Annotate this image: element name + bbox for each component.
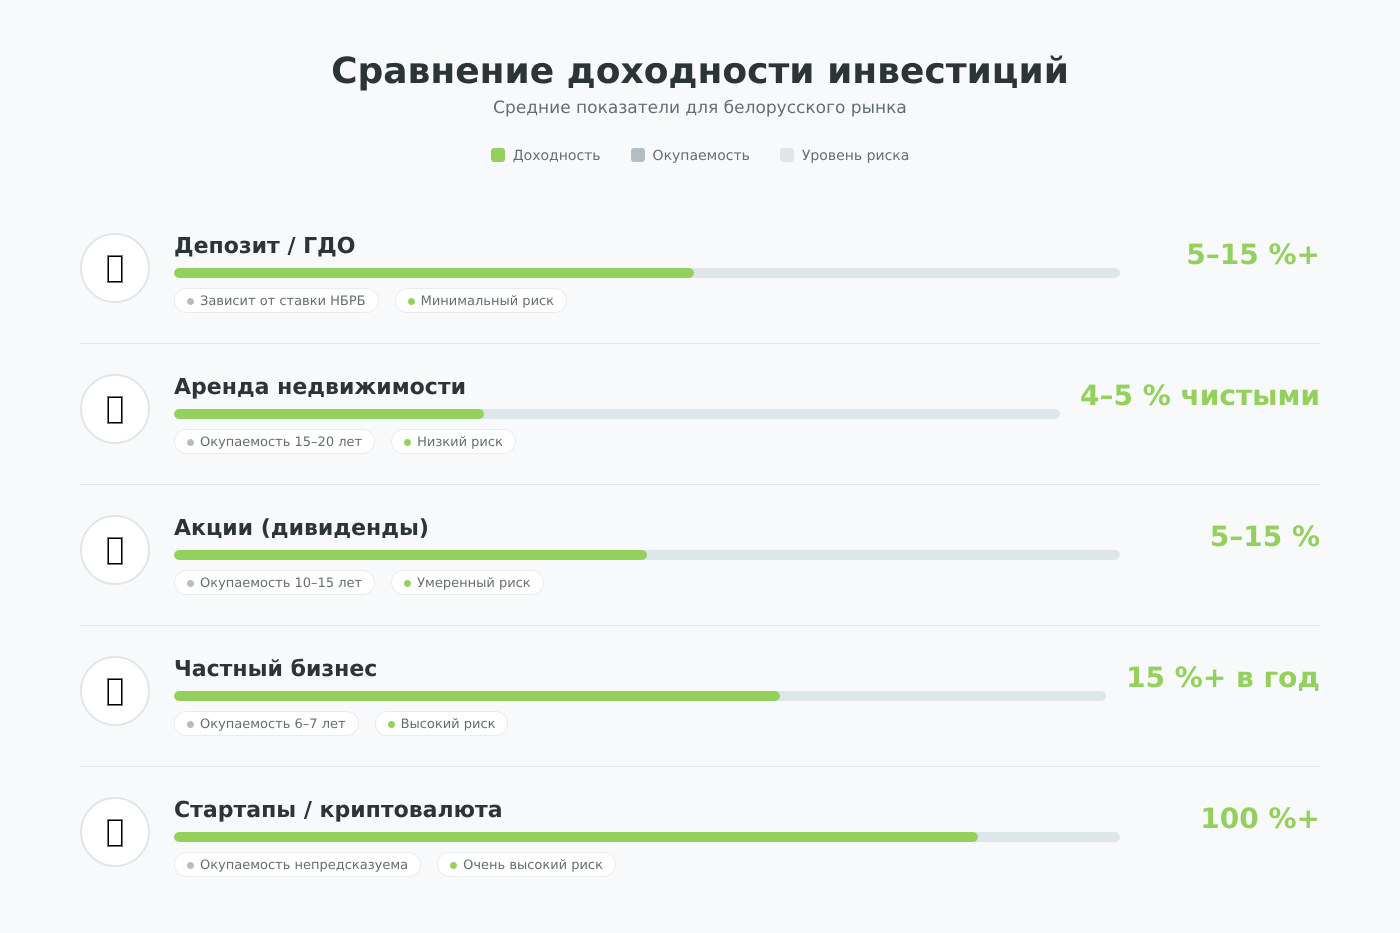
heading: Аренда недвижимости bbox=[174, 375, 466, 400]
tag: payback bbox=[174, 570, 375, 595]
row content: startups bbox=[174, 798, 1120, 877]
row content: business bbox=[174, 657, 1106, 736]
tags bbox=[174, 288, 567, 313]
tag: payback: Окупаемость непредсказуема bbox=[200, 858, 408, 873]
tag: payback: Окупаемость 10–15 лет bbox=[200, 576, 362, 591]
row content: rental bbox=[174, 375, 1060, 454]
tag: risk: Очень высокий риск bbox=[463, 858, 603, 873]
row: stocks bbox=[80, 515, 1320, 595]
subtitle: Средние показатели для белорусского рынка bbox=[493, 98, 907, 118]
tag: risk bbox=[437, 852, 616, 877]
heading: Стартапы / криптовалюта bbox=[174, 798, 503, 823]
row: deposit bbox=[80, 233, 1320, 313]
legend item: risk level: Уровень риска bbox=[802, 148, 909, 164]
legend item: yield: Доходность bbox=[513, 148, 601, 164]
row content: stocks bbox=[174, 516, 1120, 595]
legend item: payback: Окупаемость bbox=[653, 148, 750, 164]
heading: Частный бизнес bbox=[174, 657, 377, 682]
value: 100 %+ bbox=[1200, 802, 1320, 835]
tag: risk: Низкий риск bbox=[417, 435, 503, 450]
tag: payback bbox=[174, 288, 379, 313]
icon: missing-glyph box in circle bbox=[80, 233, 150, 303]
row content: deposit bbox=[174, 234, 1120, 313]
tag: payback: Окупаемость 15–20 лет bbox=[200, 435, 362, 450]
heading: Акции (дивиденды) bbox=[174, 516, 429, 541]
icon: missing-glyph box in circle bbox=[80, 797, 150, 867]
tag: payback bbox=[174, 429, 375, 454]
value: 5–15 %+ bbox=[1186, 238, 1320, 271]
icon: missing-glyph box in circle bbox=[80, 515, 150, 585]
bar bbox=[174, 268, 1120, 278]
tag: risk bbox=[391, 429, 516, 454]
tags bbox=[174, 570, 544, 595]
tag: risk bbox=[375, 711, 508, 736]
value: 5–15 % bbox=[1210, 520, 1320, 553]
bar bbox=[174, 691, 1106, 701]
tag: payback bbox=[174, 711, 359, 736]
tags bbox=[174, 429, 516, 454]
tags bbox=[174, 852, 616, 877]
row: rental property bbox=[80, 374, 1320, 454]
tag: risk: Высокий риск bbox=[401, 717, 495, 732]
tags bbox=[174, 711, 508, 736]
tag: payback bbox=[174, 852, 421, 877]
row: private business bbox=[80, 656, 1320, 736]
bar bbox=[174, 832, 1120, 842]
tag: risk bbox=[395, 288, 567, 313]
tag: risk bbox=[391, 570, 544, 595]
title: Сравнение доходности инвестиций bbox=[331, 51, 1069, 92]
bar bbox=[174, 550, 1120, 560]
heading: Депозит / ГДО bbox=[174, 234, 355, 259]
tag: risk: Умеренный риск bbox=[417, 576, 531, 591]
tag: risk: Минимальный риск bbox=[421, 294, 554, 309]
icon: missing-glyph box in circle bbox=[80, 374, 150, 444]
row: startups and crypto bbox=[80, 797, 1320, 877]
tag: payback: Зависит от ставки НБРБ bbox=[200, 294, 366, 309]
value: 15 %+ в год bbox=[1126, 661, 1320, 694]
value: 4–5 % чистыми bbox=[1080, 379, 1320, 412]
icon: missing-glyph box in circle bbox=[80, 656, 150, 726]
legend bbox=[491, 148, 909, 164]
tag: payback: Окупаемость 6–7 лет bbox=[200, 717, 346, 732]
bar bbox=[174, 409, 1060, 419]
